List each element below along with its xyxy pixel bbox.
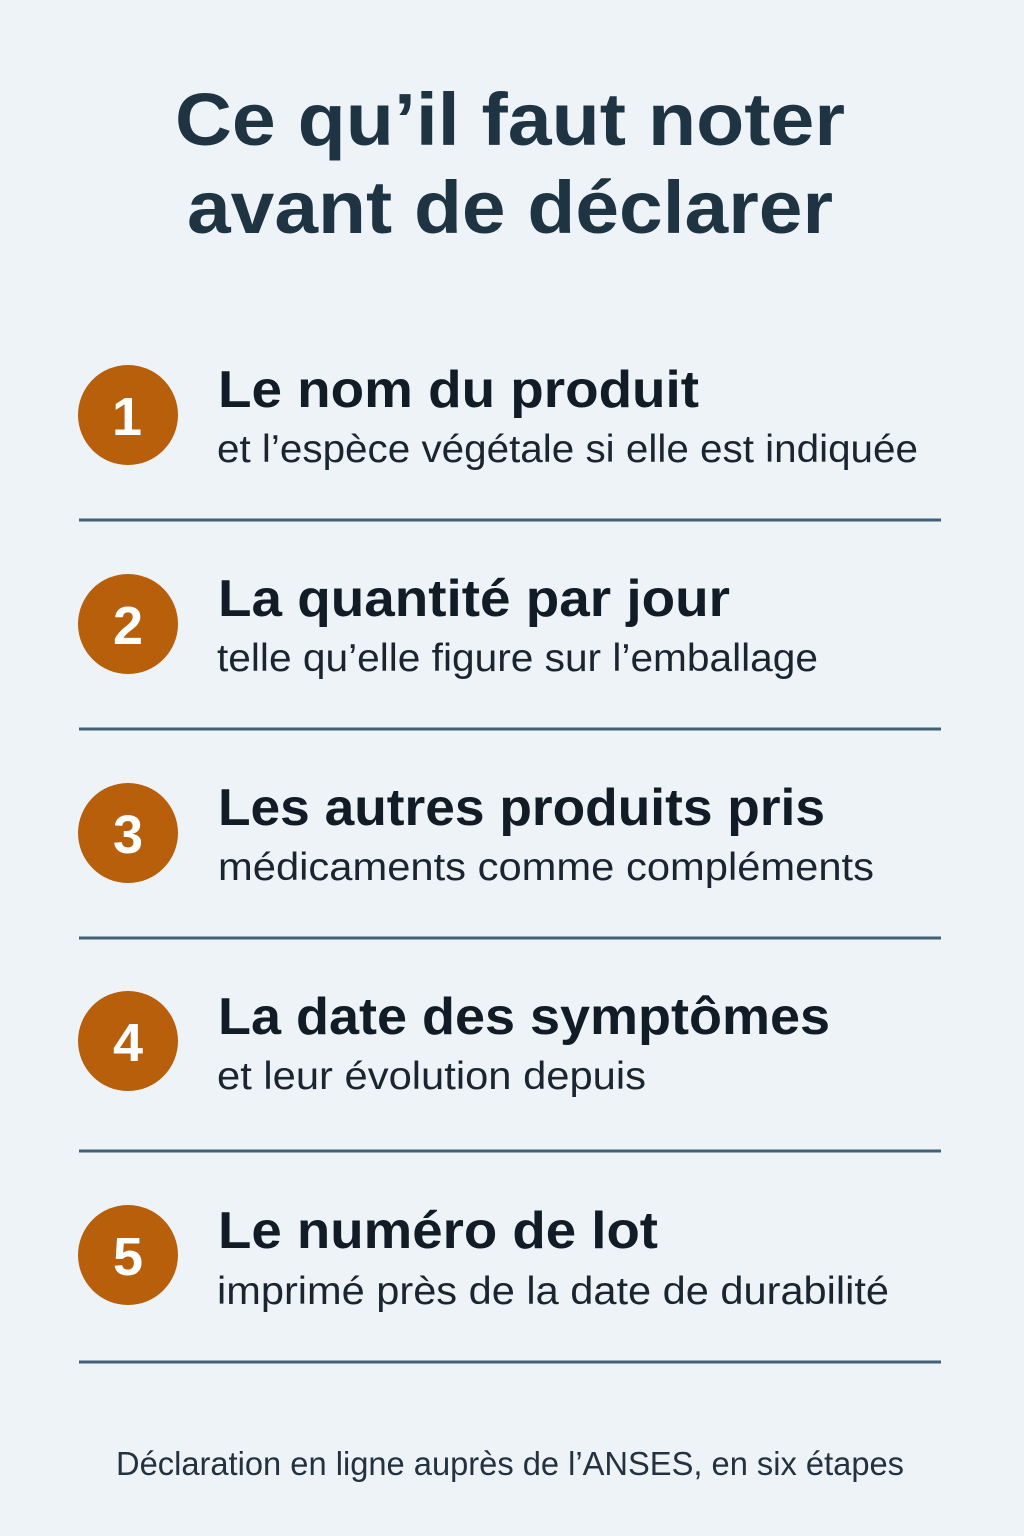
- title: avant de déclarer: [187, 166, 833, 249]
- number badge 5: 5: [113, 1227, 143, 1287]
- item 1: [78, 361, 918, 471]
- number badge 1: [78, 365, 178, 465]
- heading 1: Le nom du produit: [218, 361, 699, 419]
- item 5: [78, 1202, 889, 1313]
- number badge 3: 3: [113, 805, 143, 865]
- item 2: [78, 570, 818, 680]
- heading 3: Les autres produits pris: [218, 779, 825, 837]
- number badge 2: 2: [113, 596, 143, 656]
- number badge 4: 4: [113, 1013, 143, 1073]
- title: Ce qu’il faut noter: [175, 78, 845, 161]
- description 2: telle qu’elle figure sur l’emballage: [217, 637, 818, 680]
- title: [175, 78, 845, 249]
- description 3: médicaments comme compléments: [218, 846, 874, 889]
- description 1: et l’espèce végétale si elle est indiquée: [217, 428, 918, 471]
- description 4: et leur évolution depuis: [217, 1055, 646, 1098]
- number badge 1: 1: [112, 387, 142, 447]
- footer note: Déclaration en ligne auprès de l’ANSES, en six étapes: [116, 1445, 904, 1482]
- number badge 2: [78, 574, 178, 674]
- item 4: [78, 988, 830, 1098]
- description 5: imprimé près de la date de durabilité: [217, 1270, 889, 1313]
- number badge 3: [78, 783, 178, 883]
- item 3: [78, 779, 874, 889]
- number badge 5: [78, 1205, 178, 1305]
- heading 5: Le numéro de lot: [218, 1202, 658, 1260]
- heading 2: La quantité par jour: [218, 570, 730, 628]
- number badge 4: [78, 991, 178, 1091]
- heading 4: La date des symptômes: [218, 988, 830, 1046]
